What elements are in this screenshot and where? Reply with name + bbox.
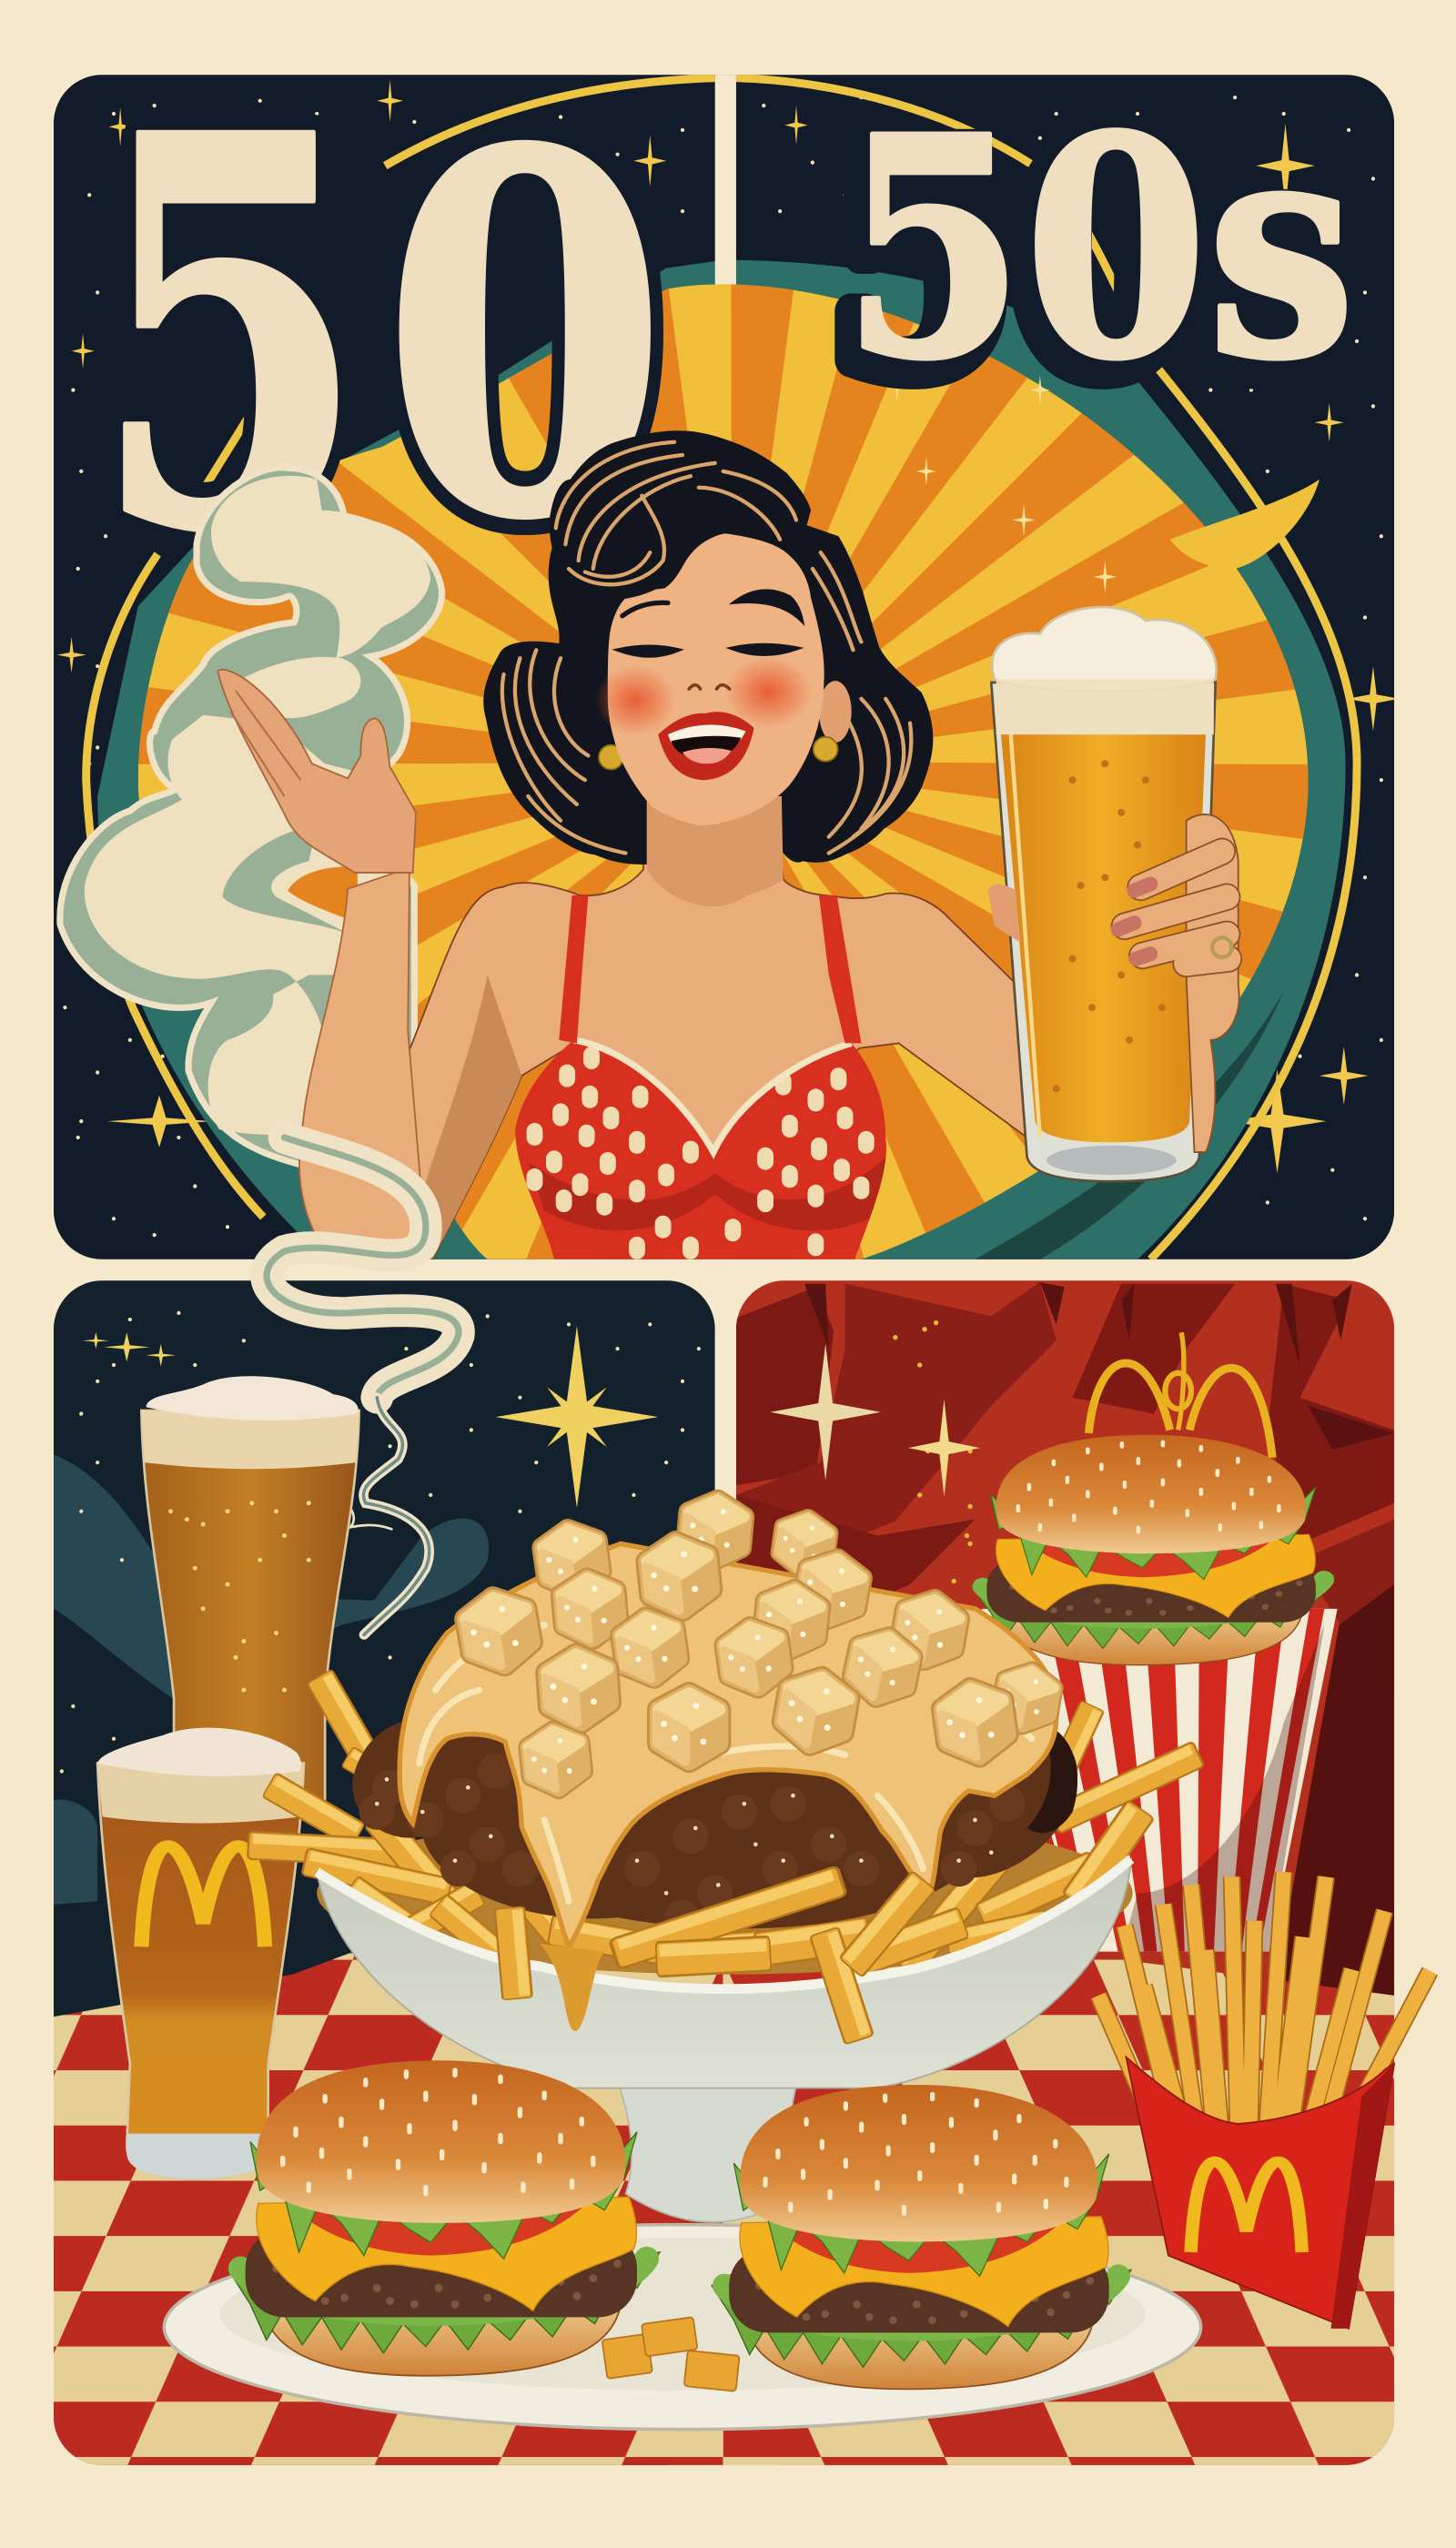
title: big 50: 5 <box>93 20 366 650</box>
mouth <box>658 712 754 780</box>
ring: teal band <box>97 260 1346 1259</box>
eyebrows <box>622 602 668 616</box>
overhanging fries <box>495 1906 532 2000</box>
forearm <box>299 868 420 1259</box>
logo: ribbon arches above burger <box>1088 1332 1272 1458</box>
stars: dots <box>65 97 1414 1235</box>
eyes <box>619 647 678 656</box>
cheese sauce <box>399 1543 1057 1946</box>
striped bucket <box>982 1609 1338 1952</box>
panel: bottom right curtain <box>736 1280 1394 2465</box>
woman <box>217 430 1040 1268</box>
beer glass: short with logo <box>97 1728 304 2179</box>
gravy chunks <box>377 1752 1007 1917</box>
hair highlights <box>502 442 911 854</box>
fries on plate <box>602 2317 740 2391</box>
finger lines <box>231 691 300 796</box>
dress <box>515 1042 886 1259</box>
fries carton <box>1098 1872 1430 2329</box>
split notch <box>715 65 736 284</box>
dress neckline trim <box>573 1040 852 1152</box>
title: big 50 <box>123 115 664 548</box>
sunburst <box>138 284 1309 1259</box>
cheese curds <box>461 1498 1057 1792</box>
bowl front <box>317 1859 1131 2088</box>
body skin <box>410 864 1025 1259</box>
curtain facets <box>736 1287 834 1485</box>
curtain dots <box>895 1323 970 1582</box>
smoke wisp <box>267 1138 459 1634</box>
logo: arches on carton <box>1191 2161 1302 2252</box>
poutine bowl stem <box>614 2072 800 2222</box>
ear <box>819 681 852 743</box>
stars: sparkles <box>56 80 1400 1173</box>
beer glass: large <box>991 607 1217 1181</box>
hair back <box>483 488 933 864</box>
bowl back <box>317 1812 1133 1975</box>
panel: top poster <box>54 20 1414 1268</box>
nose <box>689 685 730 689</box>
face <box>608 533 824 825</box>
front fries over gravy <box>610 1866 846 1969</box>
stars <box>770 1344 881 1481</box>
fries in bowl <box>248 1669 1204 1978</box>
bowl rim <box>317 1859 1131 1989</box>
carton side <box>1330 2064 1394 2329</box>
panel: bottom left sky <box>54 1280 715 2465</box>
poutine <box>248 1498 1204 2088</box>
hand raised <box>217 670 416 873</box>
arm shadow <box>420 975 521 1259</box>
title: 50s: 50s <box>829 85 1342 440</box>
night sky <box>54 75 1394 1259</box>
pompadour <box>550 430 811 600</box>
smoke cloud <box>60 468 442 1165</box>
burger: back right <box>972 1435 1335 1665</box>
beer glass: tall <box>141 1376 359 1804</box>
small sparkles <box>83 1332 176 1367</box>
title: big 50: 5 <box>93 20 366 650</box>
stars <box>62 1313 699 1771</box>
dark gravy edge <box>1027 1723 1077 1833</box>
bucket shadow <box>1121 1625 1324 1952</box>
logo: arches <box>141 1846 265 1946</box>
ring: dark teal stripe <box>975 991 1284 1259</box>
fries in carton <box>1098 1872 1430 2145</box>
title: 50s: 50s <box>842 71 1355 426</box>
dress straps <box>559 895 861 1043</box>
earrings <box>599 737 838 770</box>
burger: front right <box>712 2085 1131 2389</box>
carton body <box>1127 2058 1394 2329</box>
plate <box>164 2225 1201 2430</box>
title: 50s <box>834 127 1347 389</box>
table: checkerboard <box>54 1953 1394 2470</box>
gravy highlights <box>377 1747 1059 1893</box>
title: big 50: 0 <box>382 46 668 628</box>
sauce drip <box>540 1944 604 2031</box>
hand on glass <box>988 814 1239 1152</box>
sparkles on sun <box>306 372 1117 850</box>
title: big 50: 0 <box>382 46 668 628</box>
clouds <box>54 1454 489 1905</box>
flame accent <box>1170 480 1320 569</box>
big star <box>496 1326 658 1508</box>
cheeks <box>597 668 672 733</box>
ring: yellow outer <box>86 78 1357 1259</box>
cheese highlights <box>420 1625 1032 1901</box>
neck <box>647 796 784 906</box>
gravy <box>352 1716 1077 1928</box>
burger: front left <box>228 2060 660 2376</box>
